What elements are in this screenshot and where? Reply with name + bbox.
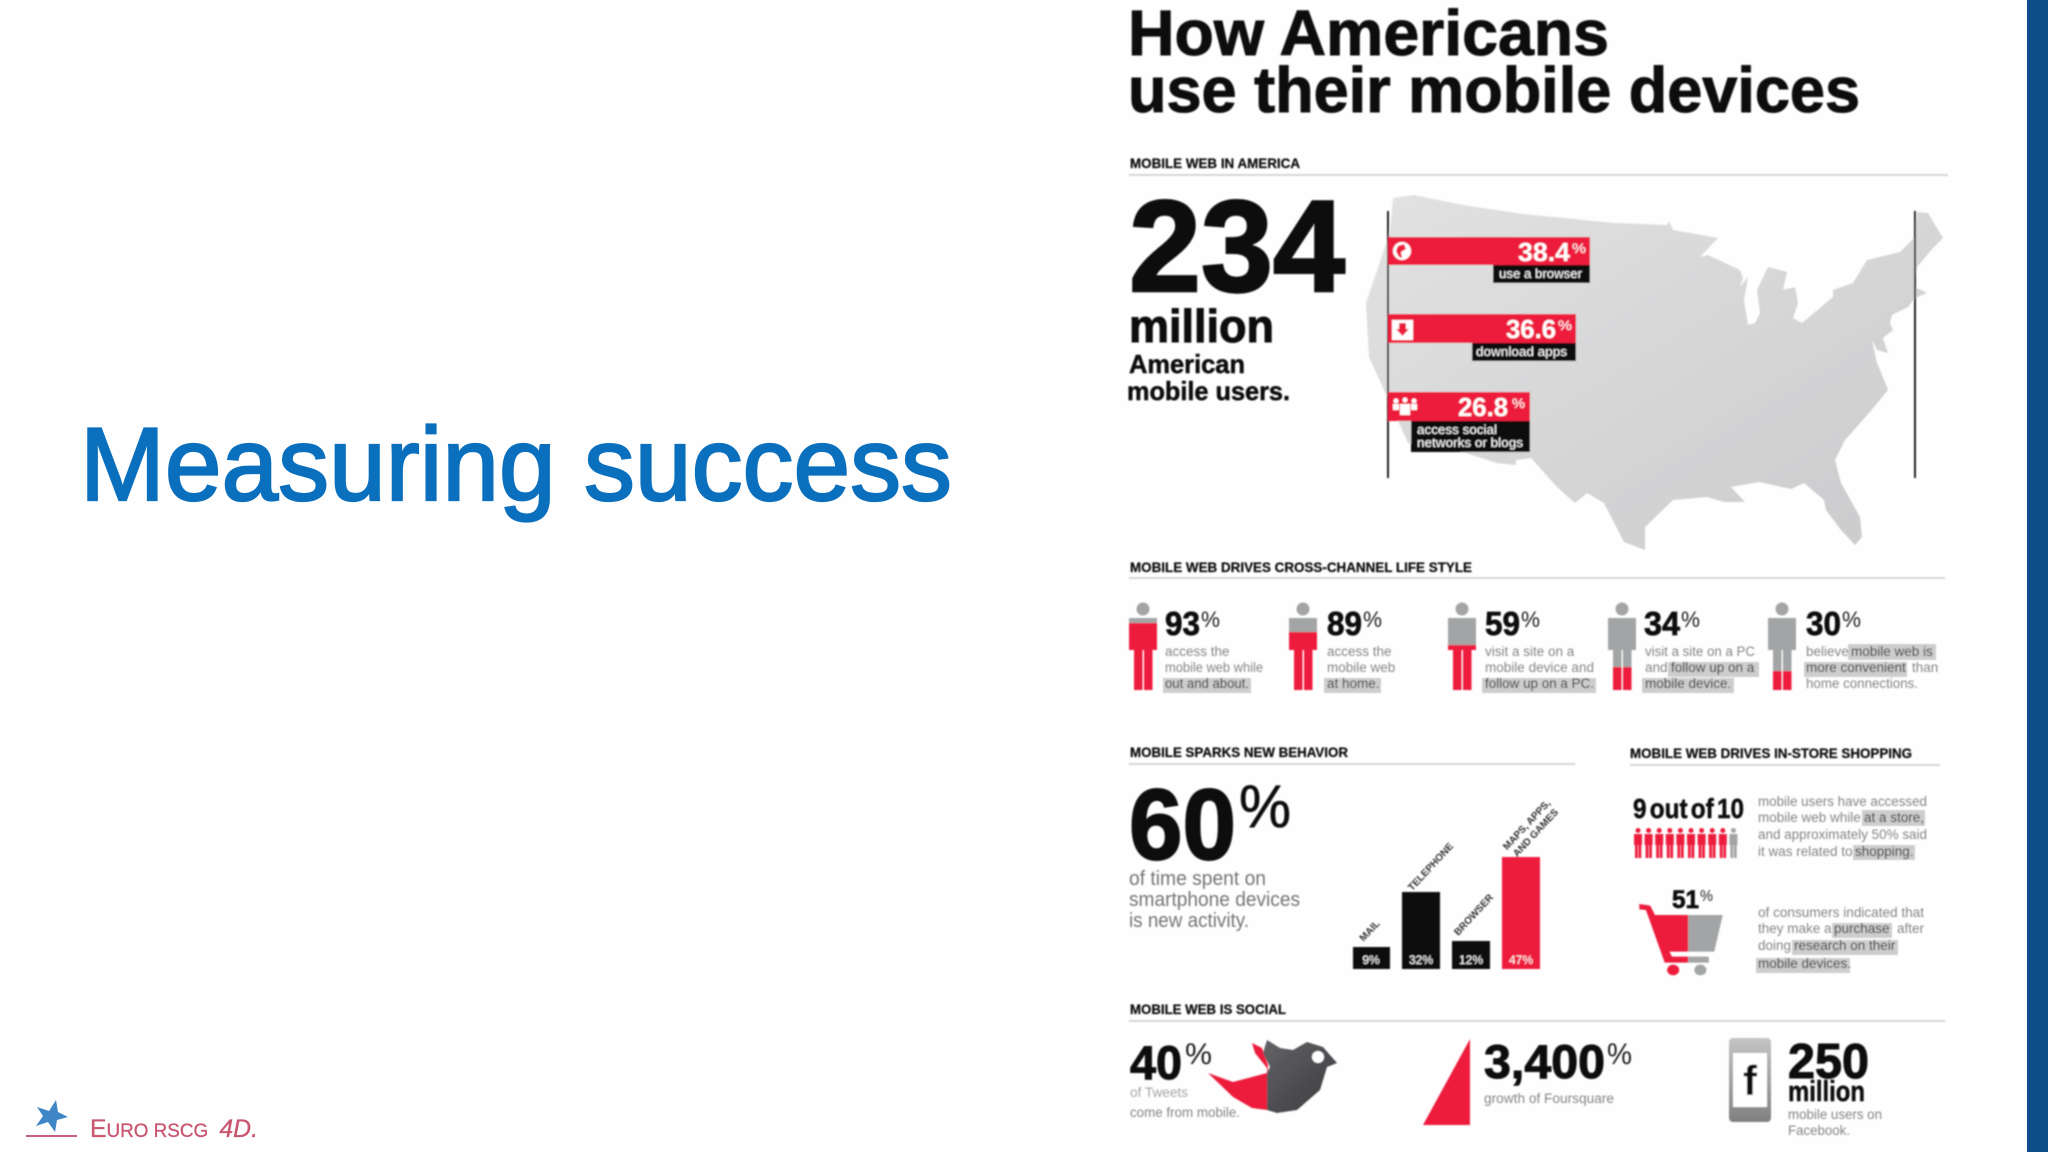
- panel: in-store shopping: [1630, 746, 1940, 975]
- bar: 36.6% download apps: [1388, 314, 1576, 361]
- bar: 36.6% download apps: %: [1558, 317, 1572, 333]
- text: store usage: shopping.: [1855, 844, 1914, 859]
- text: purchase research: mobile devices.: [1758, 956, 1851, 971]
- text: purchase research: doing: [1758, 938, 1791, 953]
- stat: 250 million: Facebook.: [1788, 1123, 1850, 1138]
- stat: 93%: access the: [1165, 644, 1230, 659]
- stat: 30%: [1768, 602, 1938, 691]
- text: purchase research: purchase: [1834, 921, 1890, 936]
- icon: row of ten people: [1634, 828, 1737, 858]
- bar: telephone: [1402, 841, 1456, 969]
- bar: 26.8% social: 26.8: [1458, 392, 1508, 422]
- slide title: Measuring success: [80, 407, 952, 523]
- stat: 59%: [1448, 602, 1596, 693]
- stat: 34%: %: [1681, 607, 1700, 632]
- stat: 59%: 59: [1485, 605, 1520, 642]
- heading: MOBILE WEB DRIVES IN-STORE SHOPPING: [1630, 746, 1912, 761]
- infographic: [1127, 0, 1948, 1138]
- stat: 51%: 51: [1672, 886, 1699, 914]
- description: is new activity.: [1129, 910, 1249, 932]
- big stat: 234 million: mobile users.: [1127, 376, 1290, 406]
- bar: 38.4% use a browser: [1388, 237, 1590, 283]
- stat: 51%: [1672, 886, 1713, 914]
- stat: 9 out of 10: 9 out of 10: [1633, 793, 1744, 824]
- stat: 30%: more convenient: [1806, 660, 1906, 675]
- big stat: 234 million: [1127, 173, 1345, 406]
- big stat: 60%: 60: [1129, 769, 1236, 881]
- panel: mobile web is social: [1129, 1002, 1945, 1138]
- text: store usage: it was related to: [1758, 844, 1853, 859]
- bar: mail: 9%: [1362, 953, 1380, 967]
- stat: 93%: mobile web while: [1165, 660, 1263, 675]
- text: store usage: [1758, 794, 1927, 860]
- stat: 59%: mobile device and: [1485, 660, 1594, 675]
- stat: 93%: %: [1201, 607, 1220, 632]
- stat: 89%: 89: [1327, 605, 1362, 642]
- text: purchase research: research on their: [1794, 938, 1896, 953]
- heading: MOBILE WEB DRIVES CROSS-CHANNEL LIFE STYLE: [1130, 560, 1472, 575]
- stat: 59%: follow up on a PC.: [1485, 676, 1594, 691]
- stat: 3,400%: growth of Foursquare: [1484, 1091, 1614, 1106]
- stat: 250 million: [1788, 1035, 1882, 1138]
- icon: twitter bird: [1208, 1040, 1337, 1113]
- icon: person 93%: [1129, 602, 1157, 690]
- bar: 26.8% social: [1388, 392, 1530, 452]
- stat: 93%: 93: [1165, 605, 1200, 642]
- infographic title: [1128, 0, 1860, 126]
- stat: 93%: out and about.: [1165, 676, 1249, 691]
- big stat: 234 million: American: [1129, 349, 1245, 379]
- stat: 40% of tweets: 40: [1130, 1036, 1182, 1089]
- bar: mail: MAIL: [1358, 919, 1383, 944]
- stat: 3,400%: 3,400: [1484, 1035, 1605, 1088]
- stat: 34%: follow up on a: [1671, 660, 1755, 675]
- text: purchase research: [1756, 905, 1925, 973]
- bar: 36.6% download apps: download apps: [1476, 345, 1567, 359]
- bar: maps, apps and games: [1501, 798, 1561, 969]
- stat: 40% of tweets: of Tweets: [1130, 1085, 1188, 1100]
- bar: telephone: TELEPHONE: [1406, 841, 1456, 893]
- stat: 250 million: 250: [1788, 1035, 1869, 1089]
- description: [1129, 868, 1300, 932]
- icon: blue star: [36, 1100, 68, 1132]
- bar: 36.6% download apps: 36.6: [1506, 314, 1556, 344]
- bar chart: [1353, 798, 1561, 969]
- icon: person 34%: [1608, 602, 1636, 690]
- stat: 30%: %: [1842, 607, 1861, 632]
- bar: 38.4% use a browser: use a browser: [1499, 267, 1582, 281]
- stat: 40% of tweets: %: [1185, 1038, 1212, 1071]
- icon: person 89%: [1289, 602, 1317, 690]
- text: store usage: and approximately 50% said: [1758, 827, 1927, 842]
- infographic title: use their mobile devices: [1128, 54, 1860, 126]
- bar: maps, apps and games: AND GAMES: [1511, 807, 1561, 859]
- icon: person 30%: [1768, 602, 1796, 690]
- map of the USA: [1366, 195, 1943, 550]
- stat: 59%: visit a site on a: [1485, 644, 1575, 659]
- icon: phone with facebook f: f: [1743, 1057, 1758, 1104]
- stat: 34%: [1608, 602, 1759, 693]
- bar: telephone: 32%: [1409, 953, 1433, 967]
- logo underline: [26, 1135, 77, 1137]
- text: store usage: mobile users have accessed: [1758, 794, 1927, 809]
- icon: shopping cart: [1639, 904, 1723, 975]
- text: purchase research: of consumers indicated that: [1758, 905, 1924, 920]
- bar: maps, apps and games: MAPS, APPS,: [1501, 798, 1553, 852]
- bar: 26.8% social: access social: [1417, 423, 1497, 437]
- stat: 89%: mobile web: [1327, 660, 1395, 675]
- stat: 51%: %: [1700, 888, 1713, 905]
- big stat: 60%: %: [1239, 773, 1291, 840]
- stat: 89%: [1289, 602, 1395, 693]
- stat: 34%: and: [1645, 660, 1668, 675]
- stat: 3,400%: [1484, 1035, 1632, 1106]
- panel: mobile web in America: [1127, 156, 1948, 550]
- vertical axis lines: [1387, 211, 1916, 478]
- stat: 40% of tweets: come from mobile.: [1130, 1105, 1240, 1120]
- stat: 34%: 34: [1644, 605, 1681, 642]
- bar: 26.8% social: networks or blogs: [1417, 436, 1523, 450]
- panel: new behavior: [1129, 745, 1575, 969]
- stat: 30%: home connections.: [1806, 676, 1918, 691]
- stat: 34%: mobile device.: [1645, 676, 1731, 691]
- text: store usage: mobile web while: [1758, 810, 1861, 825]
- heading: MOBILE SPARKS NEW BEHAVIOR: [1130, 745, 1348, 760]
- text: store usage: at a store,: [1864, 810, 1924, 825]
- right edge blue bar: [2027, 0, 2048, 1152]
- logo: Euro RSCG 4D: [26, 1100, 258, 1143]
- text: purchase research: after: [1897, 921, 1925, 936]
- logo wordmark: EURO RSCG 4D.: [90, 1115, 258, 1143]
- stat: 93%: [1129, 602, 1263, 693]
- bar: browser: 12%: [1459, 953, 1483, 967]
- stat: 250 million: million: [1788, 1076, 1865, 1108]
- bar: browser: [1452, 892, 1497, 969]
- bar: mail: [1353, 919, 1390, 969]
- panel: cross-channel life style: [1129, 560, 1945, 693]
- icon: person 59%: [1448, 602, 1476, 690]
- bar: browser: BROWSER: [1452, 892, 1497, 938]
- stat: 34%: visit a site on a PC: [1645, 644, 1755, 659]
- heading: MOBILE WEB IS SOCIAL: [1130, 1002, 1286, 1017]
- stat: 30%: than: [1912, 660, 1938, 675]
- stat: 30%: mobile web is: [1851, 644, 1933, 659]
- bar: maps, apps and games: 47%: [1509, 953, 1533, 967]
- icon: globe: [1393, 242, 1411, 260]
- stat: 40% of tweets: [1130, 1036, 1240, 1120]
- icon: red triangle: [1423, 1039, 1470, 1125]
- bar: 26.8% social: %: [1512, 395, 1525, 411]
- icon: people: [1393, 398, 1417, 415]
- stat: 89%: at home.: [1327, 676, 1380, 691]
- big stat: 60%: [1129, 769, 1291, 881]
- big stat: 234 million: million: [1129, 300, 1274, 352]
- icon: download: [1392, 320, 1413, 340]
- icon: phone with facebook f: [1729, 1038, 1771, 1122]
- heading: MOBILE WEB IN AMERICA: [1130, 156, 1300, 171]
- bar: 38.4% use a browser: %: [1572, 240, 1586, 256]
- big stat: 234 million: 234: [1129, 173, 1345, 319]
- text: purchase research: they make a: [1758, 921, 1832, 936]
- stat: 59%: %: [1521, 607, 1540, 632]
- bar: 38.4% use a browser: 38.4: [1518, 237, 1571, 267]
- description: of time spent on: [1129, 868, 1266, 890]
- stat: 89%: access the: [1327, 644, 1392, 659]
- stat: 30%: believe: [1806, 644, 1849, 659]
- stat: 3,400%: %: [1607, 1038, 1632, 1071]
- description: smartphone devices: [1129, 889, 1300, 911]
- stat: 89%: %: [1363, 607, 1382, 632]
- stat: 250 million: mobile users on: [1788, 1107, 1882, 1122]
- stat: 30%: 30: [1806, 605, 1841, 642]
